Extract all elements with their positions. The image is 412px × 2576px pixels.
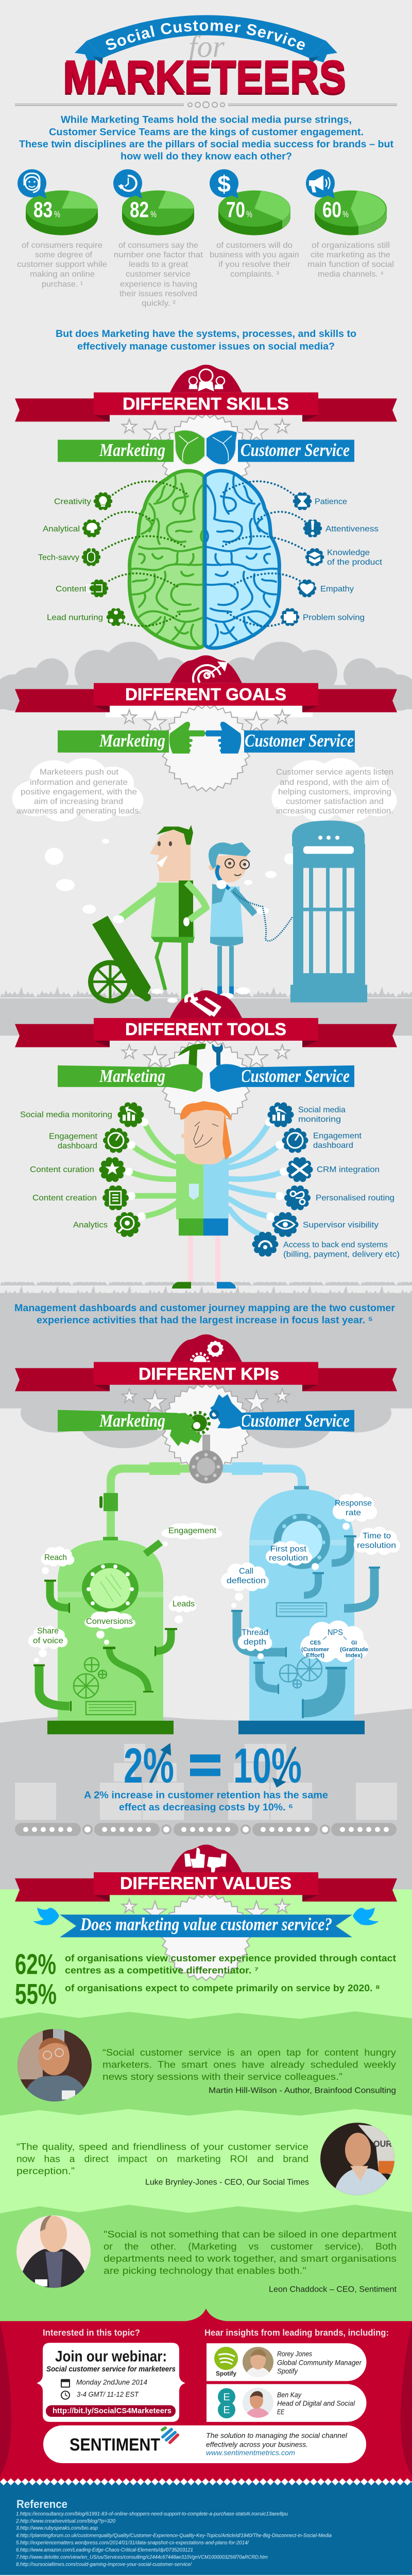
cloud: marketing goal text: awareness and generating leads. bbox=[16, 807, 141, 816]
cloud: customer service goal text bbox=[271, 758, 397, 822]
question text: But does Marketing have the systems, processes, and skills to bbox=[56, 328, 356, 340]
icon: Sentiment logo bbox=[162, 2428, 178, 2443]
cloud: marketing goal text: information and generate bbox=[30, 778, 128, 787]
panel: references bbox=[0, 2478, 412, 2575]
reference list: 8.http://oursocialtimes.com/could-gaming-improve-your-social-customer-service/ bbox=[16, 2562, 192, 2567]
photo: Luke Brynley-Jones bbox=[320, 2123, 397, 2196]
big numbers: 10% bbox=[233, 1738, 302, 1793]
stat: 60%: cite marketing as the bbox=[311, 251, 390, 260]
KPI bubbles: customer service: NPS bbox=[328, 1629, 343, 1637]
photo: Martin Hill-Wilson bbox=[17, 2029, 92, 2102]
heading: different values bbox=[15, 1844, 397, 1980]
stat: 70% bbox=[210, 170, 299, 279]
cloud: customer service goal text: customer satisfaction and bbox=[286, 798, 384, 806]
intro text bbox=[19, 114, 393, 162]
skills list: customer service: Knowledge bbox=[327, 549, 370, 557]
band: quote 3 bbox=[0, 2205, 412, 2323]
tool labels: customer service: Personalised routing bbox=[316, 1194, 394, 1202]
skills list: customer service bbox=[281, 493, 383, 626]
label bar: customer service with gear: Customer Service bbox=[241, 1410, 350, 1431]
stat: 62% bbox=[15, 1948, 397, 1980]
tool labels: customer service: CRM integration bbox=[317, 1165, 380, 1174]
label bar: customer service bbox=[206, 430, 354, 465]
callout text: A 2% increase in customer retention has the same bbox=[84, 1790, 328, 1801]
quote text 1 bbox=[102, 2047, 397, 2082]
cloud: marketing goal text: Marketeers push out bbox=[40, 768, 119, 777]
stat: 2% = 10% bbox=[15, 1738, 397, 1820]
ribbon: Social Customer Service: Social Customer Service bbox=[106, 21, 305, 50]
card: EE speaker: E bbox=[223, 2392, 230, 2403]
cloud: marketing goal text bbox=[12, 758, 143, 822]
cloud: customer service goal text: Customer service agents listen bbox=[276, 768, 393, 777]
reference list: 1.https://econsultancy.com/blog/61991-83-of-online-shoppers-need-support-to-complete-a-purchase-stats#i.mxruic13aee8pu bbox=[16, 2512, 288, 2517]
card: Spotify speaker bbox=[207, 2343, 367, 2381]
stat: 70%: $ bbox=[217, 171, 231, 197]
callout text: effect as decreasing costs by 10%. ⁶ bbox=[119, 1802, 293, 1813]
tool labels: marketing: Content creation bbox=[32, 1194, 97, 1202]
label bar: marketing with pointing hand: Marketing bbox=[99, 730, 165, 751]
card: join our webinar: 3-4 GMT/ 11-12 EST bbox=[77, 2390, 139, 2398]
icon: clock bbox=[61, 2391, 70, 2399]
headings: Hear insights from leading brands, including: bbox=[204, 2328, 389, 2338]
attribution 3: Leon Chaddock – CEO, Sentiment bbox=[269, 2285, 397, 2294]
callout text bbox=[84, 1790, 328, 1813]
cloud: customer service goal text: helping customers, improving bbox=[278, 788, 391, 796]
KPI bubbles: customer service: (Customer bbox=[301, 1647, 330, 1653]
card: Sentiment bbox=[43, 2426, 366, 2463]
gray ground with hills bbox=[0, 1708, 412, 1889]
arrow up bbox=[151, 1745, 170, 1783]
stat: 82%: leads to a great bbox=[129, 260, 188, 269]
stat: 62%: centres as a competitive differentiator. ⁷ bbox=[65, 1965, 259, 1976]
KPI bubbles: marketing bbox=[28, 1523, 222, 1663]
stat: 82% bbox=[113, 170, 203, 308]
stat: 70%: 70 bbox=[226, 198, 245, 222]
stat: 82%: number one factor that bbox=[114, 251, 203, 260]
card: Spotify speaker: Spotify bbox=[277, 2367, 298, 2375]
KPI bubbles: marketing: Conversions bbox=[86, 1617, 133, 1626]
green values background bbox=[0, 1889, 412, 2323]
KPI bubbles: marketing: Share bbox=[37, 1627, 59, 1636]
stat: 82%: quickly. ² bbox=[142, 299, 176, 308]
stat: 60%: 60 bbox=[322, 198, 341, 222]
stat: 62%: of organisations view customer experience provided through contact bbox=[65, 1953, 397, 1963]
card: join our webinar: Social customer service for marketeers bbox=[46, 2365, 176, 2374]
small puffs bbox=[45, 839, 296, 914]
band: quote 1 bbox=[0, 2011, 412, 2115]
label bar: customer service with wrench: Customer Service bbox=[241, 1065, 350, 1086]
intro text: While Marketing Teams hold the social media purse strings, bbox=[61, 114, 352, 126]
quote text 3: departments need to work together, and smart organisations bbox=[104, 2253, 397, 2264]
stat: 70%: if you resolve their bbox=[218, 260, 290, 269]
big numbers bbox=[124, 1738, 302, 1793]
stat: 83%: some degree of bbox=[35, 251, 93, 260]
skills list: customer service: Attentiveness bbox=[325, 525, 379, 533]
stat: 83%: customer support while bbox=[17, 260, 107, 269]
icon: left bird bbox=[33, 1908, 59, 1925]
quote text 1: marketers. The smart ones have already scheduled weekly bbox=[102, 2059, 397, 2070]
KPI bubbles: marketing: Engagement bbox=[168, 1527, 217, 1535]
skills list: marketing: Content bbox=[56, 585, 87, 594]
character: customer service agent bbox=[209, 842, 293, 999]
skills list: customer service: Problem solving bbox=[303, 614, 365, 622]
reference list: 2.http://www.creativevirtual.com/blog/?p=320 bbox=[15, 2518, 115, 2524]
quote text 3 bbox=[104, 2229, 397, 2276]
KPI bubbles: marketing: of voice bbox=[33, 1636, 63, 1645]
KPI bubbles: marketing: Leads bbox=[173, 1600, 195, 1608]
stat: 70%: % bbox=[246, 209, 252, 219]
gray band with grass and clouds bbox=[0, 1282, 412, 1448]
label bar: marketing with gear bbox=[58, 1410, 209, 1446]
stat: 55% bbox=[15, 1978, 380, 2010]
stat: 82%: % bbox=[150, 209, 157, 219]
card: EE speaker: Head of Digital and Social bbox=[277, 2399, 355, 2408]
cloud: marketing goal text: aim of increasing brand bbox=[34, 798, 123, 806]
label bar: marketing with hammer: Marketing bbox=[99, 1065, 165, 1086]
card: Sentiment: www.sentimentmetrics.com bbox=[206, 2448, 295, 2456]
reference list: 4.http://planningforum.co.uk/customerquality/Quality/Customer-Experience-Quality-Key-Topics/ArticleId/1840/The-Big-Disconnect-in-Social-Media bbox=[16, 2533, 332, 2539]
phone booth bbox=[290, 821, 367, 1003]
label bar: marketing bbox=[58, 430, 205, 465]
label bar: customer service with pointing hand bbox=[205, 722, 355, 754]
KPI bubbles: customer service: Time to bbox=[363, 1532, 391, 1540]
stat: 70%: complaints. ³ bbox=[230, 270, 279, 279]
photo: Leon Chaddock bbox=[16, 2215, 91, 2288]
button: webinar link bbox=[46, 2405, 176, 2417]
stat: 60%: main function of social bbox=[307, 260, 394, 269]
stat: 60%: of organizations still bbox=[312, 241, 390, 250]
heading: different tools bbox=[15, 990, 397, 1126]
tool labels: customer service: Access to back end systems bbox=[283, 1241, 388, 1249]
reference list: 5.http://experiencematters.wordpress.com/2014/01/31/data-snapshot-cx-expectations-and-plans-for-2014/ bbox=[16, 2540, 249, 2546]
title block bbox=[63, 15, 346, 104]
panel: different KPIs bbox=[15, 1334, 400, 1734]
reference list bbox=[15, 2512, 332, 2567]
callout text: management dashboards: experience activities that had the largest increase in focus last year. ⁵ bbox=[37, 1315, 373, 1326]
tank: customer service bbox=[231, 1486, 380, 1734]
heading: reference: Reference bbox=[16, 2497, 67, 2511]
tool labels: marketing: dashboard bbox=[58, 1142, 97, 1150]
stat: 55%: 55% bbox=[15, 1978, 57, 2010]
panel: different values bbox=[0, 1844, 412, 2323]
conveyor belt bbox=[15, 1823, 397, 1836]
KPI bubbles: customer service: rate bbox=[346, 1509, 361, 1517]
stat: 83%: purchase. ¹ bbox=[42, 280, 83, 289]
card: Spotify speaker: Rorey Jones bbox=[277, 2350, 312, 2358]
green shoe and blue shoe bbox=[172, 1282, 236, 1289]
word: MARKETEERS: MARKETEERS bbox=[64, 51, 346, 102]
tool labels: marketing: Content curation bbox=[30, 1165, 94, 1174]
KPI bubbles: customer service: (Gratitude bbox=[340, 1647, 368, 1653]
tool labels: marketing: Social media monitoring bbox=[20, 1111, 112, 1120]
stat: 55%: of organisations expect to compete primarily on service by 2020. ⁸ bbox=[65, 1982, 380, 1993]
quote text 1: “Social customer service is an open tap for content hungry bbox=[102, 2047, 397, 2058]
cloud: customer service goal text: and respond, with the aim of bbox=[280, 778, 389, 787]
attribution 2: Luke Brynley-Jones - CEO, Our Social Times bbox=[145, 2178, 309, 2187]
skills list: marketing: Analytical bbox=[43, 525, 80, 533]
card: EE speaker bbox=[207, 2384, 367, 2422]
multi-armed character bbox=[125, 1101, 288, 1283]
stat: 83%: 83 bbox=[33, 198, 53, 222]
tool labels: marketing bbox=[20, 1111, 112, 1230]
skills list: marketing: Tech-savvy bbox=[38, 553, 79, 562]
stat: 83%: % bbox=[54, 209, 60, 219]
tool labels: customer service: Engagement bbox=[313, 1132, 362, 1141]
quote text 2 bbox=[16, 2141, 308, 2176]
stat: 70%: of customers will do bbox=[216, 241, 293, 250]
side curtains bbox=[0, 2322, 412, 2476]
label bar: customer service with pointing hand: Customer Service bbox=[245, 730, 354, 751]
KPI bubbles: customer service: CES bbox=[310, 1640, 321, 1646]
stat: 83%: of consumers require bbox=[22, 241, 102, 250]
KPI bubbles: customer service: depth bbox=[244, 1638, 266, 1647]
stat: 70%: business with you again bbox=[210, 251, 299, 260]
stat: 82%: their issues resolved bbox=[119, 290, 197, 298]
card: join our webinar: Join our webinar: bbox=[55, 2348, 167, 2365]
attribution 1: Martin Hill-Wilson - Author, Brainfood Consulting bbox=[209, 2087, 396, 2095]
big numbers: 2% bbox=[124, 1738, 174, 1793]
button: webinar link: http://bit.ly/SocialCS4Marketeers bbox=[53, 2407, 171, 2415]
icon: right bird bbox=[353, 1908, 379, 1925]
tool labels: customer service bbox=[283, 1106, 400, 1259]
stat: 83% bbox=[17, 170, 107, 289]
heading: different skills: DIFFERENT SKILLS bbox=[123, 395, 289, 414]
stat: 60%: % bbox=[342, 209, 349, 219]
intro text: Customer Service Teams are the kings of customer engagement. bbox=[49, 127, 364, 138]
stacked boxes bbox=[15, 1744, 397, 1820]
stat: 82%: customer service bbox=[126, 270, 191, 279]
cannon bbox=[91, 916, 151, 1002]
label bar: marketing with hammer bbox=[58, 1044, 206, 1092]
label bar: marketing with gear: Marketing bbox=[99, 1410, 165, 1431]
panel: different goals bbox=[0, 642, 412, 1036]
stat: 62%: 62% bbox=[15, 1948, 56, 1980]
ribbon: does marketing value customer service: Does marketing value customer service? bbox=[80, 1914, 332, 1934]
skills list: customer service: of the product bbox=[327, 558, 383, 567]
skills list: customer service: Patience bbox=[315, 498, 347, 506]
character: marketer bbox=[113, 825, 206, 1003]
KPI bubbles: customer service: Thread bbox=[242, 1629, 268, 1637]
headings bbox=[43, 2328, 389, 2338]
KPI bubbles: customer service: First post bbox=[270, 1545, 307, 1553]
label bar: customer service with wrench bbox=[210, 1044, 354, 1092]
KPI bubbles: marketing: Reach bbox=[44, 1553, 67, 1562]
quote text 2: perception.” bbox=[16, 2165, 75, 2176]
label bar: customer service: Customer Service bbox=[241, 439, 350, 460]
card: EE speaker: E bbox=[223, 2404, 230, 2416]
KPI bubbles: customer service: resolution bbox=[269, 1554, 308, 1563]
card: join our webinar: Monday 2ndJune 2014 bbox=[76, 2378, 147, 2386]
card: Spotify speaker: Spotify bbox=[216, 2370, 236, 2377]
tool labels: marketing: Analytics bbox=[73, 1221, 108, 1230]
heading: different KPIs: DIFFERENT KPIs bbox=[139, 1365, 279, 1384]
word: MARKETEERS: MARKETEERS bbox=[63, 53, 346, 104]
heading: different goals: DIFFERENT GOALS bbox=[125, 685, 286, 704]
card: EE speaker: Ben Kay bbox=[277, 2391, 302, 2399]
reference list: 6.http://www.amazon.com/Leading-Edge-Chaos-Critical-Elements/dp/0735203121 bbox=[16, 2548, 193, 2553]
intro text: These twin disciplines are the pillars of social media success for brands – but bbox=[19, 139, 393, 150]
quote text 3: or the other. (Marketing vs customer service). Both bbox=[104, 2241, 397, 2251]
heading: different KPIs bbox=[15, 1334, 397, 1470]
arrow down bbox=[274, 1747, 296, 1786]
quote text 2: now has a direct impact on marketing ROI and brand bbox=[16, 2154, 308, 2164]
KPI bubbles: customer service: Response bbox=[335, 1499, 372, 1507]
tool labels: customer service: Supervisor visibility bbox=[303, 1221, 379, 1230]
stat: 60% bbox=[306, 170, 394, 279]
skills list: marketing bbox=[38, 493, 125, 626]
KPI bubbles: customer service bbox=[221, 1493, 400, 1662]
tool badges: marketing bbox=[99, 1103, 144, 1237]
intro text: how well do they know each other? bbox=[121, 151, 292, 162]
icon: calendar bbox=[61, 2380, 70, 2387]
heading: different values: DIFFERENT VALUES bbox=[120, 1874, 291, 1893]
card: Spotify speaker: Global Community Manager bbox=[277, 2358, 362, 2366]
question text: effectively manage customer issues on social media? bbox=[77, 341, 335, 352]
card: Sentiment: The solution to managing the social channel bbox=[206, 2431, 348, 2439]
panel: different skills bbox=[15, 365, 397, 648]
KPI bubbles: customer service: Index) bbox=[346, 1653, 363, 1659]
pipes and valve bbox=[99, 1435, 302, 1537]
red background bbox=[0, 2309, 412, 2482]
ribbon: Social Customer Service bbox=[75, 15, 337, 65]
callout text: management dashboards: Management dashboards and customer journey mapping are the two customer bbox=[14, 1302, 395, 1314]
label bar: marketing with pointing hand bbox=[58, 722, 205, 754]
grass band bbox=[0, 987, 412, 1036]
KPI bubbles: customer service: GI bbox=[351, 1640, 357, 1646]
card: join our webinar bbox=[37, 2343, 185, 2422]
dotted connectors bbox=[102, 481, 305, 626]
headings: Interested in this topic? bbox=[43, 2328, 140, 2338]
tool labels: customer service: Social media bbox=[298, 1106, 346, 1114]
heading: different tools: DIFFERENT TOOLS bbox=[125, 1021, 286, 1039]
quote text 2: “The quality, speed and friendliness of your customer service bbox=[16, 2141, 308, 2152]
reference list: 3.http://www.rubyspeaks.com/bio.asp bbox=[16, 2526, 98, 2531]
tool labels: customer service: (billing, payment, delivery etc) bbox=[283, 1250, 400, 1259]
skills list: marketing: Lead nurturing bbox=[47, 614, 103, 622]
cloud: customer service goal text: increasing customer retention. bbox=[276, 807, 393, 816]
reference list: 7.http://www.deloitte.com/view/en_US/us/Services/consulting/c2444c67448ae310VgnVCM1000003256f70aRCRD.htm bbox=[16, 2555, 268, 2561]
card: EE speaker: EE bbox=[277, 2408, 285, 2416]
background clouds bbox=[0, 642, 412, 711]
band: quote 2 bbox=[16, 2123, 397, 2196]
label bar: marketing: Marketing bbox=[99, 439, 165, 460]
heading: different goals bbox=[15, 655, 397, 791]
label bar: customer service with gear bbox=[210, 1394, 354, 1432]
stat: 82%: experience is having bbox=[120, 280, 197, 289]
card: Sentiment: effectively across your business. bbox=[206, 2441, 308, 2449]
cloud: marketing goal text: positive engagement, with the bbox=[21, 788, 137, 796]
photo: Luke Brynley-Jones: OUR bbox=[373, 2139, 392, 2149]
stat: 83%: making an online bbox=[30, 270, 95, 279]
stat: 82%: of consumers say the bbox=[118, 241, 198, 250]
heading: different skills bbox=[15, 365, 397, 500]
skills list: marketing: Creativity bbox=[54, 498, 91, 506]
stat: 82%: 82 bbox=[130, 198, 149, 222]
tool labels: customer service: dashboard bbox=[313, 1141, 353, 1150]
tool badges: customer service bbox=[252, 1103, 313, 1257]
question text bbox=[56, 328, 356, 352]
KPI bubbles: customer service: resolution bbox=[357, 1541, 396, 1550]
tank: marketing bbox=[33, 1537, 177, 1734]
KPI bubbles: customer service: deflection bbox=[227, 1577, 266, 1585]
KPI bubbles: customer service: Effort) bbox=[306, 1653, 324, 1659]
quote text 1: news story sessions with their service colleagues.” bbox=[102, 2071, 342, 2082]
stat: 60%: media channels. ⁴ bbox=[318, 270, 384, 279]
tool labels: marketing: Engagement bbox=[49, 1132, 98, 1141]
skills list: customer service: Empathy bbox=[320, 585, 354, 594]
callout text: management dashboards bbox=[14, 1302, 395, 1326]
card: Sentiment: SENTIMENT bbox=[70, 2435, 160, 2454]
tool labels: customer service: monitoring bbox=[298, 1115, 341, 1124]
divider bbox=[15, 101, 397, 108]
panel: different tools bbox=[15, 990, 400, 1283]
brain bbox=[129, 471, 280, 648]
quote text 3: "Social is not something that can be siloed in one department bbox=[104, 2229, 397, 2240]
panel: webinar promotion bbox=[0, 2309, 412, 2482]
KPI bubbles: customer service: Call bbox=[239, 1567, 253, 1575]
quote text 3: are picking technology that enables both." bbox=[104, 2265, 306, 2276]
word: for: for bbox=[188, 29, 225, 64]
